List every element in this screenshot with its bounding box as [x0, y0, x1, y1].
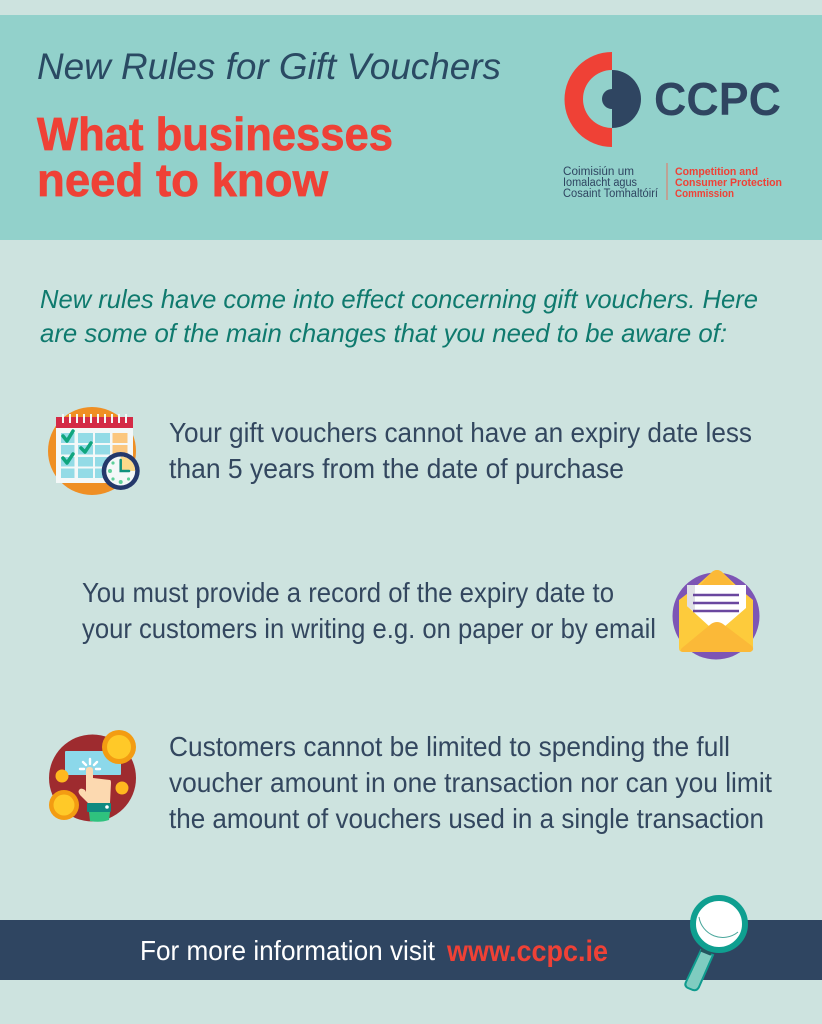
text: written record rule: your customers in writing e.g. on paper or by email	[82, 613, 656, 644]
icon: magnifying glass	[685, 898, 745, 990]
logo text: Irish name: Coimisiún um	[563, 166, 634, 178]
icon: calendar and clock	[48, 407, 140, 495]
logo text: English name	[675, 166, 782, 200]
footer bar	[0, 920, 822, 980]
logo text: English name: Commission	[675, 188, 734, 200]
text: transaction rule: voucher amount in one transaction nor can you limit	[169, 767, 772, 798]
text: expiry date rule: Your gift vouchers cannot have an expiry date less	[169, 417, 752, 448]
text: written record rule	[82, 577, 656, 644]
coin: bottom left	[49, 790, 79, 820]
text: written record rule: You must provide a record of the expiry date to	[82, 577, 614, 608]
footer link: www.ccpc.ie	[446, 935, 608, 968]
heading: what businesses need to know: need to know	[37, 154, 328, 206]
intro text	[40, 284, 758, 348]
logo text: English name: Competition and	[675, 166, 758, 178]
footer text: For more information visit	[140, 935, 435, 966]
logo wordmark: CCPC	[654, 73, 781, 125]
logo text: Irish name: Iomalacht agus	[563, 177, 637, 189]
text: expiry date rule	[169, 417, 752, 484]
intro text: are some of the main changes that you need to be aware of:	[40, 318, 727, 348]
logo mark	[565, 52, 641, 147]
logo text: Irish name	[563, 166, 659, 200]
icon: hand tapping screen with coins	[49, 730, 136, 822]
panel: header	[0, 15, 822, 240]
intro text: New rules have come into effect concerning gift vouchers. Here	[40, 284, 758, 314]
title: new rules: New Rules for Gift Vouchers	[37, 46, 501, 87]
heading: what businesses need to know	[37, 108, 393, 206]
icon: envelope	[672, 570, 760, 660]
coin: top right	[102, 730, 136, 764]
text: expiry date rule: than 5 years from the date of purchase	[169, 453, 624, 484]
text: transaction rule	[169, 731, 772, 834]
logo text: Irish name: Cosaint Tomhaltóirí	[563, 188, 659, 200]
logo: CCPC	[563, 52, 782, 200]
logo text: English name: Consumer Protection	[675, 177, 782, 189]
text: transaction rule: Customers cannot be limited to spending the full	[169, 731, 730, 762]
text: transaction rule: the amount of vouchers used in a single transaction	[169, 803, 764, 834]
heading: what businesses need to know: What businesses	[37, 108, 393, 160]
